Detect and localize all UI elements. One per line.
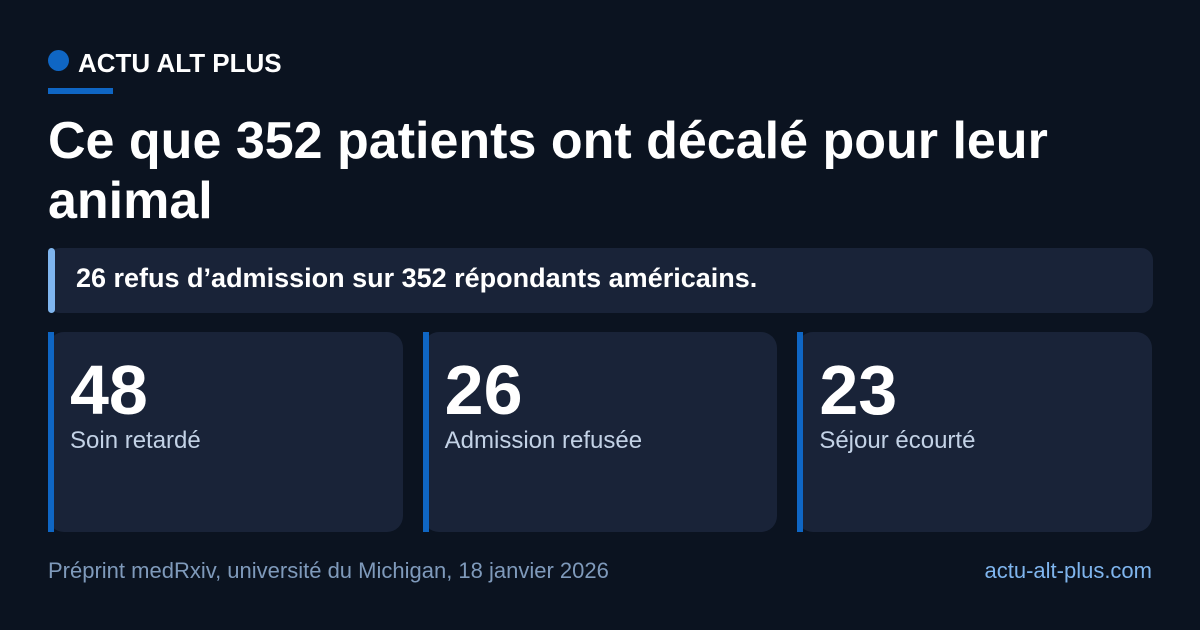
number: 48 [70, 351, 148, 429]
label: Admission refusée [445, 427, 642, 454]
card accent bar [48, 332, 54, 532]
brand underline [48, 88, 112, 94]
number: 23 [819, 351, 897, 429]
label: Soin retardé [70, 427, 201, 454]
panel: stat 23 [797, 332, 1152, 532]
panel: stat 26 [423, 332, 777, 532]
callout panel [48, 248, 1153, 313]
number: 26 [445, 351, 523, 429]
site link: actu-alt-plus.com [984, 558, 1152, 583]
callout text: 26 refus d’admission sur 352 répondants américains. [76, 263, 757, 293]
callout accent bar [48, 248, 55, 313]
panel: stat 48 [48, 332, 403, 532]
card background [48, 332, 403, 532]
card background [797, 332, 1152, 532]
title: Ce que 352 patients ont décalé pour leur animal [48, 112, 1048, 230]
card accent bar [797, 332, 803, 532]
source footer: Préprint medRxiv, université du Michigan, 18 janvier 2026 [48, 558, 609, 583]
card accent bar [423, 332, 429, 532]
label: Séjour écourté [819, 427, 975, 454]
brand name: ACTU ALT PLUS [78, 48, 282, 78]
brand dot icon [48, 50, 69, 71]
card background [423, 332, 777, 532]
